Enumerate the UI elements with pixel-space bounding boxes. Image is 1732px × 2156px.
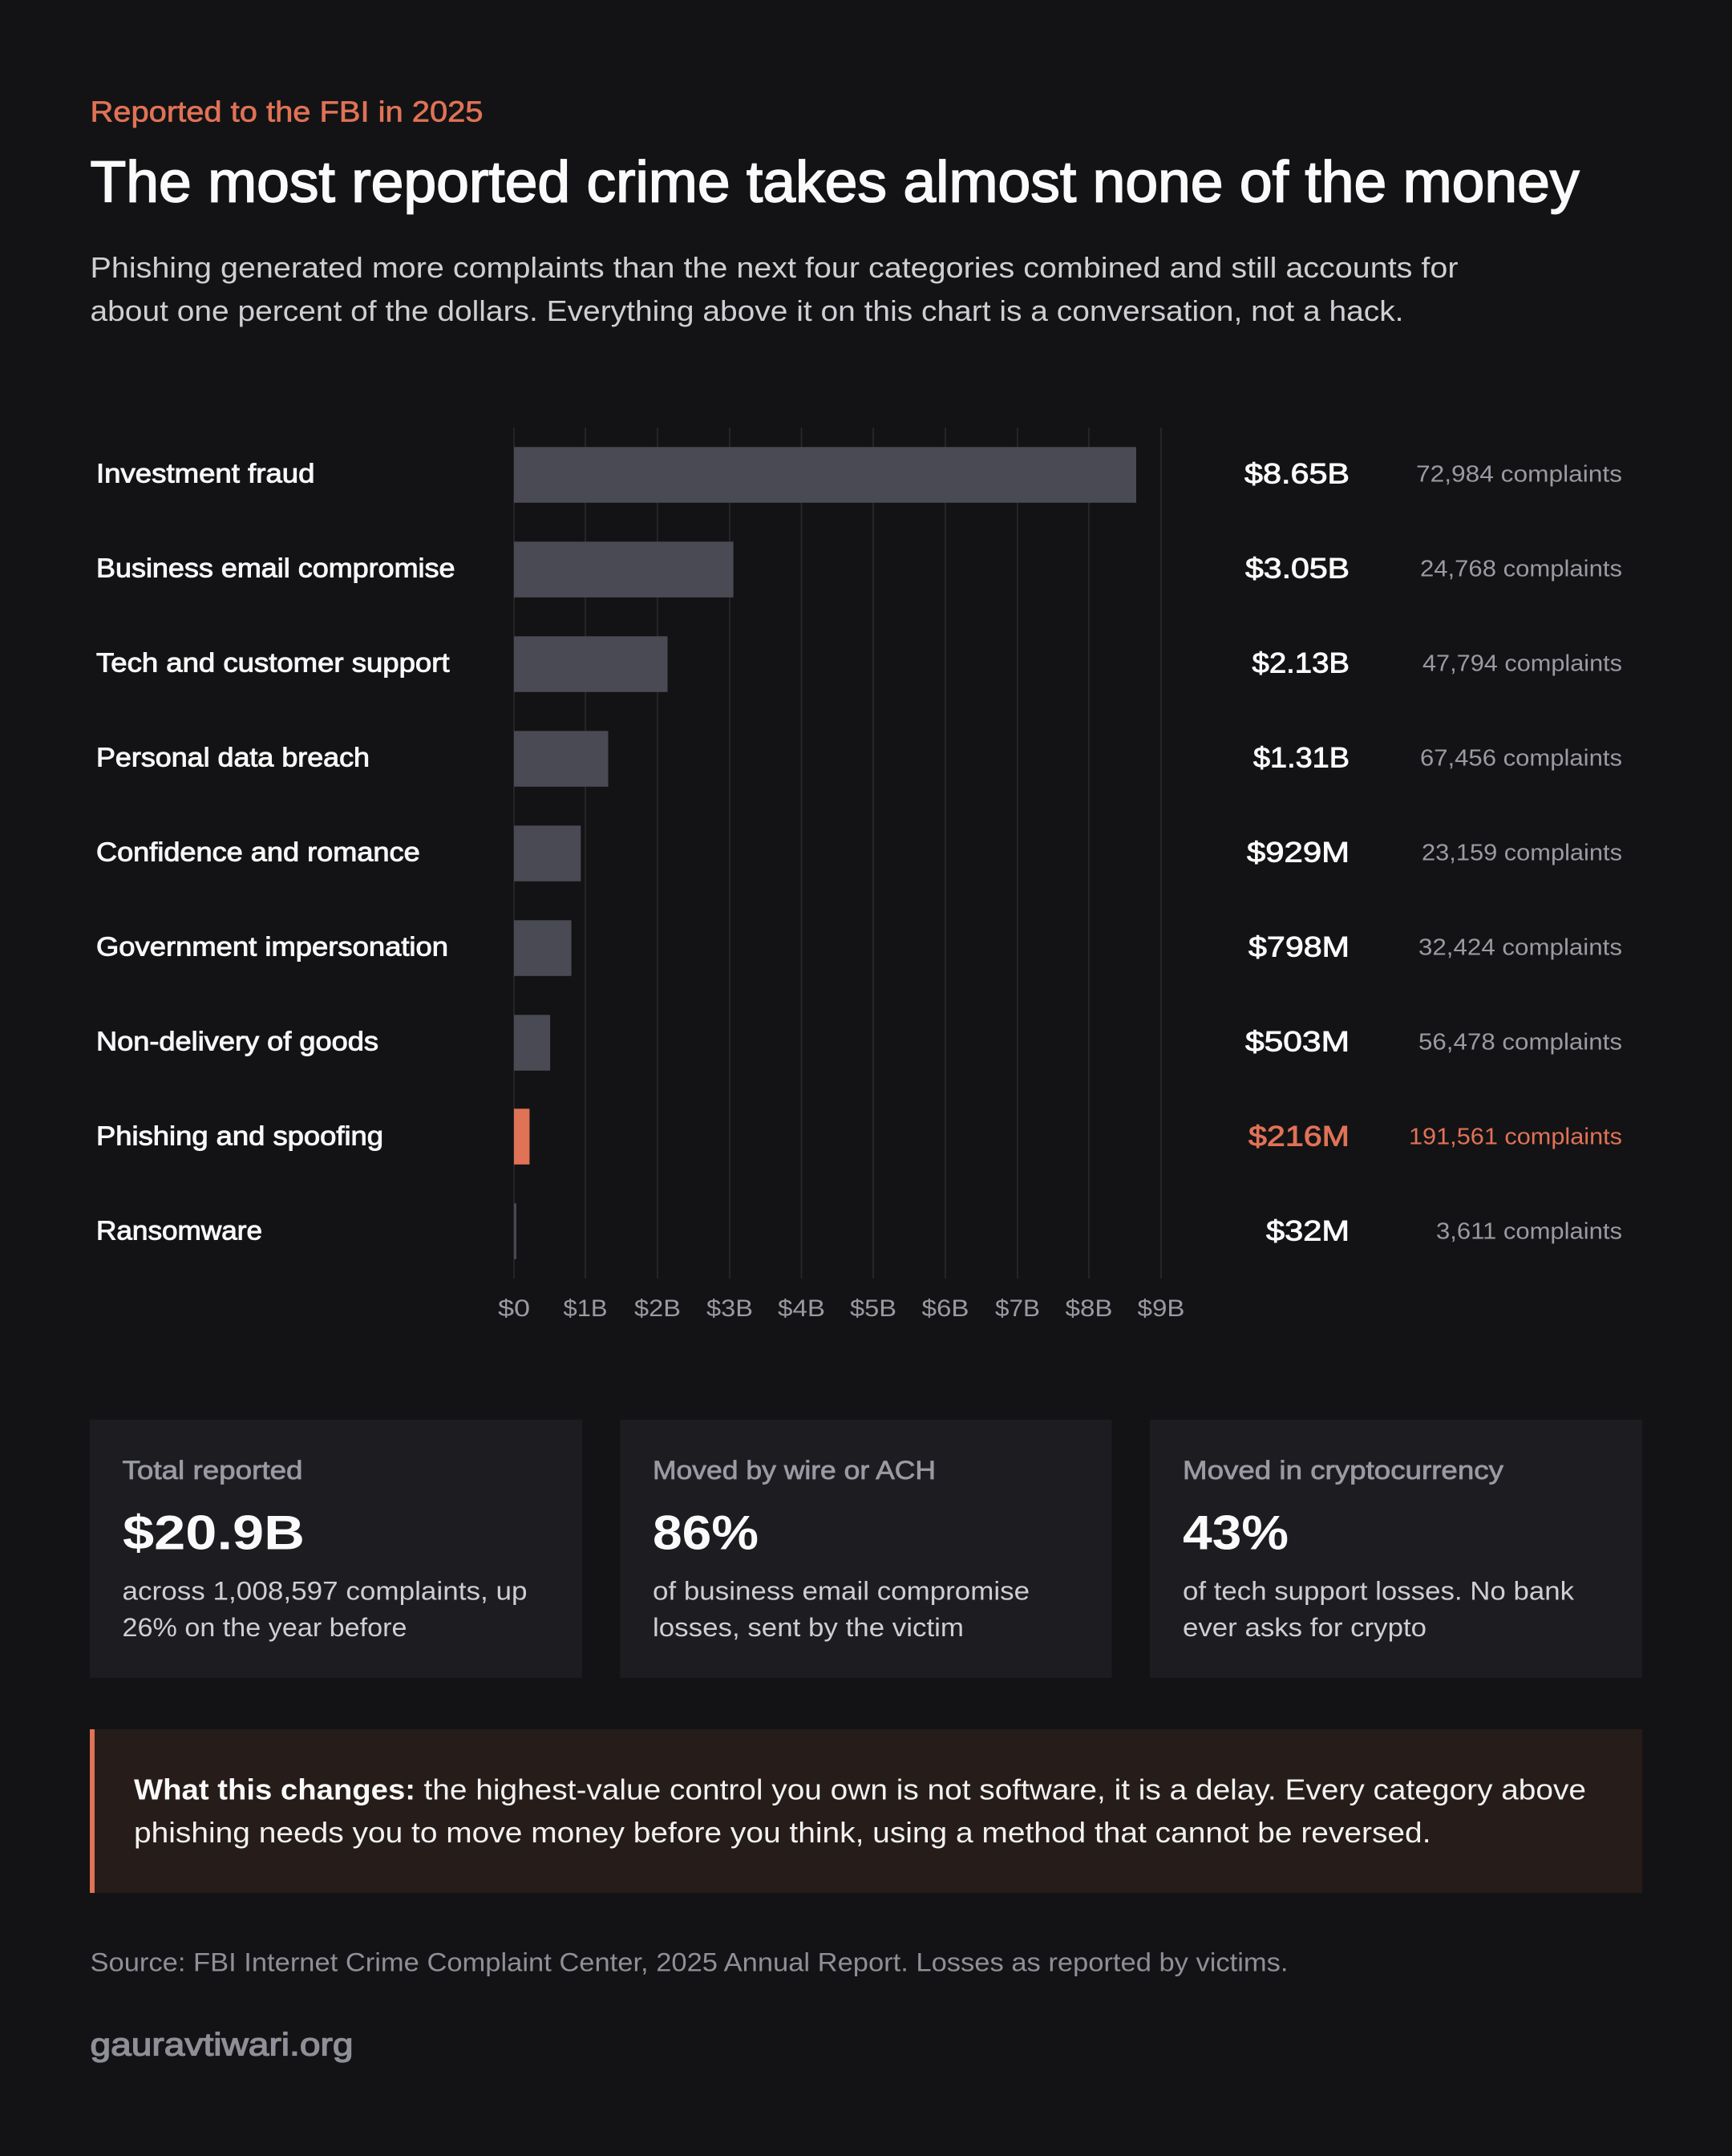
row: Government impersonation: $798M xyxy=(1248,932,1350,963)
row: Non-delivery of goods: 56,478 complaints xyxy=(1418,1030,1622,1056)
x axis labels: $5B xyxy=(850,1295,896,1322)
x axis labels: $3B xyxy=(706,1295,753,1322)
panel: total reported: Total reported xyxy=(122,1456,303,1485)
panel: moved in cryptocurrency xyxy=(1150,1420,1642,1678)
row: Non-delivery of goods: $503M xyxy=(1245,1027,1350,1058)
source note: Source: FBI Internet Crime Complaint Center, 2025 Annual Report. Losses as reported by victims. xyxy=(90,1947,1288,1976)
row: Investment fraud: $8.65B xyxy=(1244,459,1350,490)
subtitle: about one percent of the dollars. Everything above it on this chart is a conversation, not a hack. xyxy=(90,294,1404,327)
panel: total reported: across 1,008,597 complaints, up xyxy=(122,1576,528,1605)
callout xyxy=(90,1729,1642,1893)
panel: moved in cryptocurrency: ever asks for crypto xyxy=(1183,1613,1426,1642)
panel: moved in cryptocurrency: Moved in cryptocurrency xyxy=(1183,1456,1503,1485)
row: Personal data breach: 67,456 complaints xyxy=(1420,746,1622,772)
panel: moved by wire or ACH: losses, sent by the victim xyxy=(653,1613,964,1642)
brand: gauravtiwari.org xyxy=(90,2028,353,2063)
row: Business email compromise: $3.05B xyxy=(1245,553,1350,585)
row: Ransomware: 3,611 complaints xyxy=(1436,1219,1622,1245)
row: Phishing and spoofing: $216M xyxy=(1248,1121,1350,1153)
row: Ransomware xyxy=(96,1203,1622,1259)
x axis labels: $2B xyxy=(634,1295,681,1322)
eyebrow: Reported to the FBI in 2025 xyxy=(90,95,483,128)
callout: phishing needs you to move money before you think, using a method that cannot be reversed. xyxy=(134,1816,1431,1849)
row: Government impersonation: Government impersonation xyxy=(96,932,448,961)
row: Confidence and romance xyxy=(96,825,1622,881)
row: Non-delivery of goods xyxy=(96,1015,1622,1071)
row: Government impersonation: 32,424 complaints xyxy=(1418,935,1622,961)
row: Ransomware: Ransomware xyxy=(96,1216,262,1245)
panel: moved by wire or ACH: 86% xyxy=(653,1506,759,1560)
panel: moved by wire or ACH xyxy=(621,1420,1111,1678)
x axis labels: $4B xyxy=(778,1295,825,1322)
x axis labels xyxy=(498,1295,1185,1322)
panel: moved in cryptocurrency: 43% xyxy=(1183,1506,1289,1560)
panel: total reported: $20.9B xyxy=(123,1506,305,1560)
row: Investment fraud: 72,984 complaints xyxy=(1416,462,1622,488)
bar chart xyxy=(96,428,1622,1322)
panel: moved by wire or ACH: of business email compromise xyxy=(653,1576,1030,1605)
row: Tech and customer support: 47,794 complaints xyxy=(1422,651,1622,677)
panel: total reported xyxy=(90,1420,582,1678)
subtitle: Phishing generated more complaints than the next four categories combined and still accounts for xyxy=(90,251,1459,284)
row: Government impersonation xyxy=(96,920,1622,976)
x axis labels: $8B xyxy=(1065,1295,1113,1322)
row: Confidence and romance: Confidence and romance xyxy=(96,837,420,866)
panel: moved in cryptocurrency: of tech support losses. No bank xyxy=(1183,1576,1575,1605)
row: Investment fraud xyxy=(96,447,1622,503)
row: Business email compromise: Business email compromise xyxy=(96,553,455,582)
row: Tech and customer support: $2.13B xyxy=(1252,648,1350,679)
title: The most reported crime takes almost none of the money xyxy=(90,151,1580,215)
row: Personal data breach xyxy=(96,731,1622,787)
x axis labels: $7B xyxy=(995,1295,1040,1322)
x axis labels: $1B xyxy=(563,1295,608,1322)
row: Confidence and romance: 23,159 complaints xyxy=(1422,841,1622,866)
row: Tech and customer support xyxy=(96,636,1622,692)
row: Business email compromise xyxy=(96,541,1622,598)
row: Personal data breach: $1.31B xyxy=(1253,743,1350,774)
row: Personal data breach: Personal data breach xyxy=(96,743,370,772)
x axis labels: $9B xyxy=(1137,1295,1185,1322)
row: Business email compromise: 24,768 complaints xyxy=(1420,557,1622,582)
row: Phishing and spoofing xyxy=(96,1108,1622,1165)
x axis labels: $6B xyxy=(922,1295,969,1322)
row: Non-delivery of goods: Non-delivery of goods xyxy=(96,1027,378,1056)
row: Phishing and spoofing: 191,561 complaints xyxy=(1409,1125,1622,1150)
x axis labels: $0 xyxy=(498,1295,530,1322)
panel: moved by wire or ACH: Moved by wire or ACH xyxy=(653,1456,936,1485)
row: Phishing and spoofing: Phishing and spoofing xyxy=(96,1121,383,1150)
row: Tech and customer support: Tech and customer support xyxy=(96,648,449,677)
callout: What this changes: xyxy=(134,1773,415,1805)
row: Investment fraud: Investment fraud xyxy=(96,459,314,488)
row: Ransomware: $32M xyxy=(1266,1216,1350,1247)
row: Confidence and romance: $929M xyxy=(1247,837,1350,869)
subtitle xyxy=(90,251,1459,327)
panel: total reported: 26% on the year before xyxy=(122,1613,407,1642)
callout: the highest-value control you own is not software, it is a delay. Every category above xyxy=(423,1773,1586,1805)
